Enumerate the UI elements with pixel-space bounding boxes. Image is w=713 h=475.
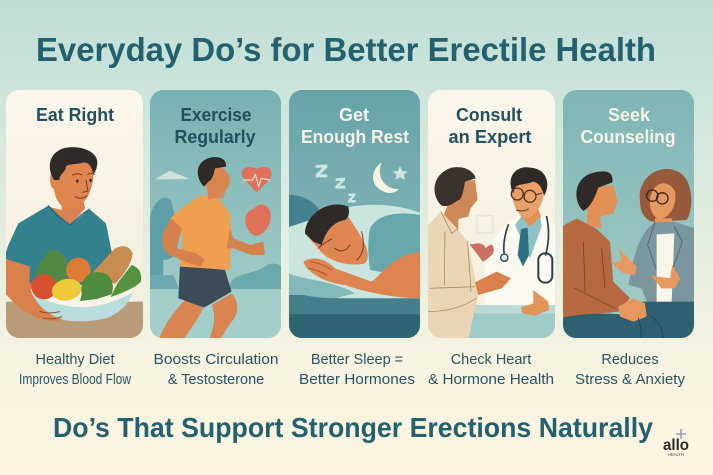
logo: allo health: HEALTH (668, 452, 684, 457)
illustration: patient and doctor (425, 167, 562, 342)
caption: expert: & Hormone Health (428, 372, 554, 388)
caption: rest: Better Sleep = (311, 352, 403, 368)
heading: Eat Right (36, 105, 114, 125)
panel: get enough rest (285, 90, 425, 342)
panel: seek counseling (558, 90, 702, 342)
heading: Seek (608, 105, 651, 125)
illustration: man with bowl of food (0, 147, 147, 342)
heading: Get (339, 105, 369, 125)
caption: expert (428, 352, 554, 388)
panel: eat right (0, 90, 147, 342)
heading: Consult (456, 105, 522, 125)
caption: counseling (575, 352, 686, 388)
panel: get enough rest: Enough Rest (301, 127, 409, 147)
caption: rest (299, 352, 415, 388)
caption: expert: Check Heart (451, 352, 531, 368)
logo: allo health (663, 429, 689, 457)
panel: exercise regularly (147, 90, 290, 342)
illustration: man jogging (150, 157, 281, 338)
logo: allo health: allo (663, 437, 689, 454)
caption: eat right: Improves Blood Flow (19, 372, 131, 388)
panel: exercise regularly: Regularly (174, 127, 256, 147)
caption: exercise: Boosts Circulation (154, 352, 278, 368)
illustration: man sleeping (285, 162, 425, 342)
caption: exercise: & Testosterone (168, 372, 264, 388)
panel: consult an expert: an Expert (448, 127, 532, 147)
caption: eat right (19, 352, 131, 388)
caption: counseling: Stress & Anxiety (575, 372, 686, 388)
caption: exercise (154, 352, 278, 388)
caption: rest: Better Hormones (299, 372, 415, 388)
caption: eat right: Healthy Diet (36, 352, 114, 368)
panel: consult an expert (425, 90, 562, 342)
heading: Exercise (180, 105, 252, 125)
panel: seek counseling: Counseling (580, 127, 676, 147)
caption: counseling: Reduces (601, 352, 659, 368)
bottom tagline: Do’s That Support Stronger Erections Naturally (53, 412, 653, 443)
title: Everyday Do’s for Better Erectile Health (36, 31, 656, 68)
illustration: man and counselor (563, 169, 694, 338)
